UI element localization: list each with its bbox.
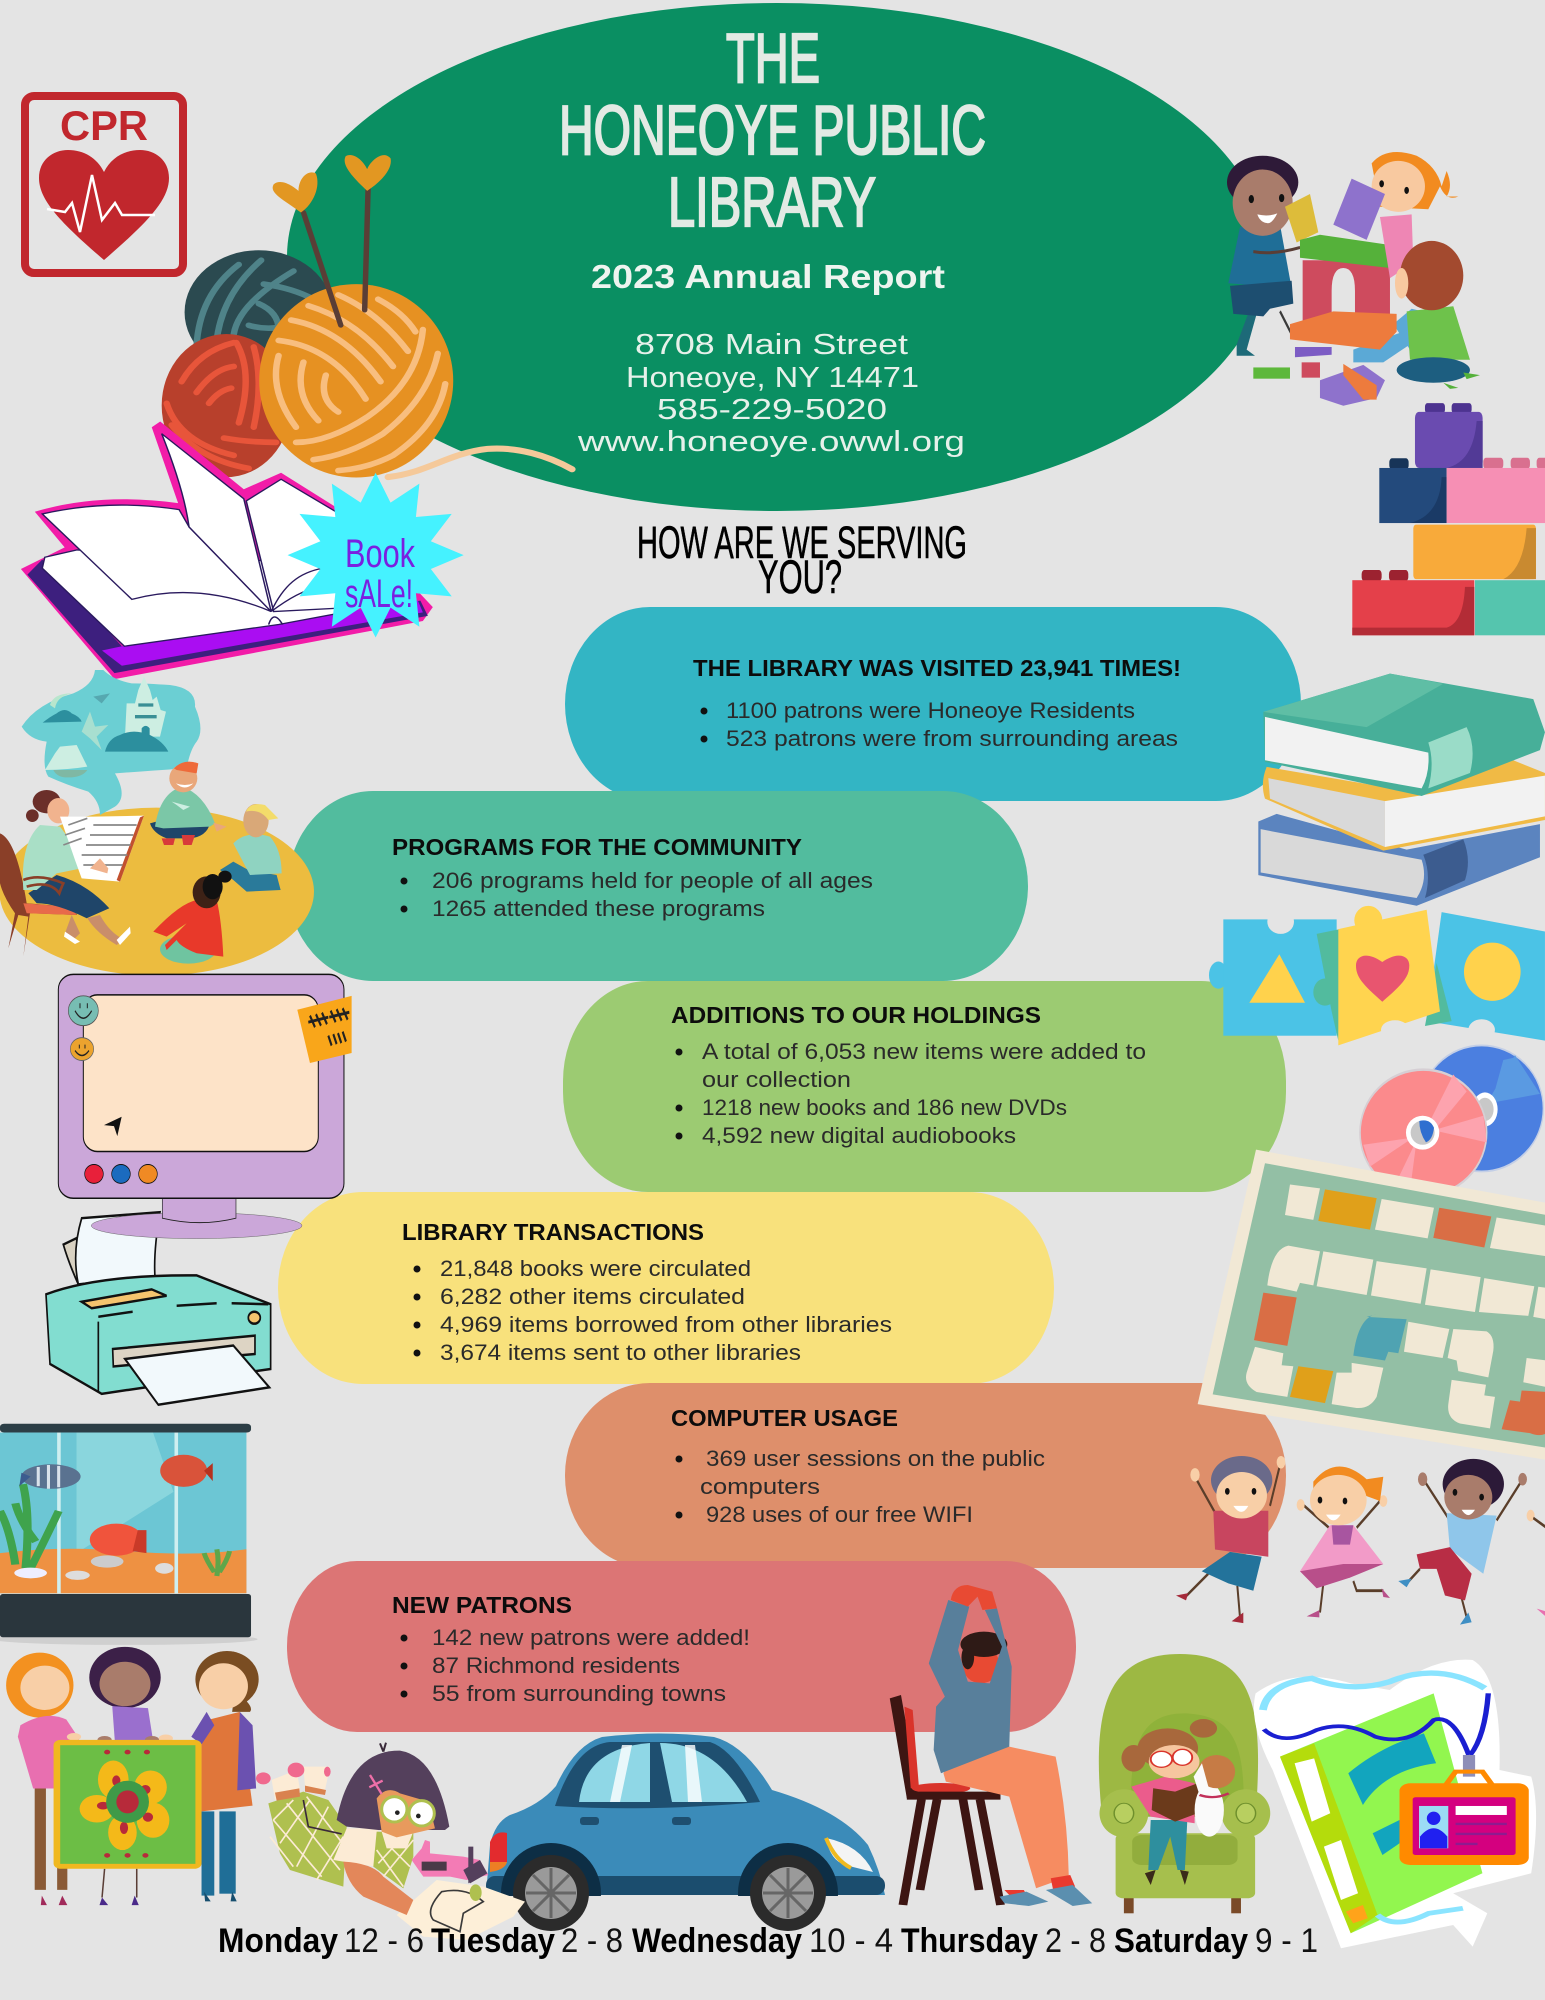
- computer bullets: computers: [700, 1474, 820, 1499]
- holdings bullets: [676, 1039, 1146, 1148]
- transactions bullets: 4,969 items borrowed from other libraries: [440, 1312, 892, 1337]
- contact details: 585-229-5020: [657, 394, 887, 426]
- book sale text: [345, 532, 416, 616]
- patrons bullets: 55 from surrounding towns: [432, 1681, 726, 1706]
- programs bullets: 206 programs held for people of all ages: [432, 868, 873, 893]
- panel: holdings: [563, 981, 1286, 1192]
- opening hours: Thursday: [901, 1922, 1038, 1960]
- sticky note: [297, 996, 352, 1063]
- programs bullets: [400, 868, 873, 921]
- illustration: girl drawing: [256, 1743, 525, 1940]
- computer bullets: [676, 1446, 1045, 1527]
- opening hours: 2 - 8: [561, 1922, 623, 1960]
- holdings heading: ADDITIONS TO OUR HOLDINGS: [671, 1002, 1041, 1028]
- teacher and chair: [0, 790, 144, 957]
- icon: CPR sign: [25, 96, 183, 273]
- opening hours: 10 - 4: [809, 1922, 893, 1960]
- opening hours: 9 - 1: [1255, 1922, 1318, 1960]
- header ellipse with library title and contact details: [287, 3, 1267, 511]
- section heading: [637, 517, 967, 603]
- illustration: man stretching on a chair: [890, 1585, 1092, 1906]
- illustration: fish tank: [0, 1424, 258, 1645]
- icon: CPR sign: CPR: [60, 102, 148, 149]
- opening hours: Wednesday: [632, 1922, 802, 1960]
- book sale text: sALe!: [345, 572, 413, 616]
- transactions bullets: 6,282 other items circulated: [440, 1284, 745, 1309]
- contact details: [577, 329, 965, 458]
- computer bullets: 369 user sessions on the public: [706, 1446, 1045, 1471]
- patrons heading: NEW PATRONS: [392, 1592, 572, 1618]
- opening hours: [218, 1922, 1318, 1960]
- programs bullets: 1265 attended these programs: [432, 896, 765, 921]
- illustration: girl and dog reading in an armchair: [1099, 1654, 1270, 1913]
- panel: computer usage: [565, 1383, 1286, 1568]
- holdings bullets: 4,592 new digital audiobooks: [702, 1123, 1016, 1148]
- computer heading: COMPUTER USAGE: [671, 1405, 898, 1431]
- icon: open book with book sale burst: [21, 422, 464, 679]
- title: [559, 19, 986, 241]
- title: THE: [726, 19, 820, 97]
- child three: [1398, 1459, 1527, 1625]
- holdings bullets: A total of 6,053 new items were added to: [702, 1039, 1146, 1064]
- title: LIBRARY: [668, 163, 876, 241]
- contact details: Honeoye, NY 14471: [626, 362, 919, 394]
- subtitle: 2023 Annual Report: [591, 258, 945, 295]
- opening hours: Tuesday: [431, 1922, 555, 1960]
- illustration: jigsaw puzzle pieces: [1209, 906, 1545, 1045]
- section heading: YOU?: [758, 550, 842, 603]
- contact details: www.honeoye.owwl.org: [577, 426, 965, 458]
- holdings bullets: 1218 new books and 186 new DVDs: [702, 1095, 1067, 1120]
- illustration: toy building bricks: [1352, 403, 1545, 635]
- computer bullets: 928 uses of our free WIFI: [706, 1502, 973, 1527]
- panel: new patrons: [287, 1561, 1076, 1732]
- panel: transactions: [278, 1192, 1054, 1384]
- illustration: jumping children: [1176, 1456, 1545, 1625]
- illustration: stack of books: [1258, 674, 1545, 906]
- panel: programs: [288, 791, 1028, 981]
- opening hours: 2 - 8: [1045, 1922, 1106, 1960]
- patrons bullets: 142 new patrons were added!: [432, 1625, 750, 1650]
- id badge: [1400, 1783, 1529, 1865]
- quilt: [54, 1740, 202, 1869]
- patrons bullets: [400, 1625, 750, 1706]
- icon: printer: [46, 1212, 271, 1405]
- illustration: blue car: [486, 1734, 885, 1943]
- transactions bullets: [414, 1256, 892, 1365]
- transactions bullets: 3,674 items sent to other libraries: [440, 1340, 801, 1365]
- icon: CDs and DVDs: [1360, 1045, 1543, 1196]
- thought cloud: [22, 670, 200, 815]
- icon: computer monitor: [58, 974, 352, 1239]
- patrons bullets: 87 Richmond residents: [432, 1653, 680, 1678]
- child one: [1176, 1456, 1285, 1623]
- transactions bullets: 21,848 books were circulated: [440, 1256, 751, 1281]
- panel: visits: [565, 607, 1301, 801]
- child two: [1297, 1466, 1390, 1617]
- illustration: board game: [1198, 1150, 1545, 1460]
- visits bullets: 1100 patrons were Honeoye Residents: [726, 698, 1135, 723]
- transactions heading: LIBRARY TRANSACTIONS: [402, 1219, 704, 1245]
- icon: yarn balls and knitting needles: [162, 155, 572, 478]
- visits heading: THE LIBRARY WAS VISITED 23,941 TIMES!: [693, 655, 1181, 681]
- illustration: three women holding a quilt: [6, 1647, 259, 1905]
- visits bullets: 523 patrons were from surrounding areas: [726, 726, 1178, 751]
- illustration: library card binder with lanyard: [1254, 1660, 1536, 1948]
- visits bullets: [700, 698, 1178, 751]
- holdings bullets: our collection: [702, 1067, 851, 1092]
- illustration: children building with blocks: [1227, 152, 1480, 406]
- title: HONEOYE PUBLIC: [559, 91, 986, 169]
- contact details: 8708 Main Street: [635, 329, 908, 361]
- seated children: [150, 762, 282, 964]
- programs heading: PROGRAMS FOR THE COMMUNITY: [392, 834, 802, 860]
- man's shirt and raised arms: [929, 1600, 1012, 1773]
- child four, cropped: [1527, 1510, 1545, 1617]
- section heading: HOW ARE WE SERVING: [637, 517, 967, 568]
- opening hours: Saturday: [1114, 1922, 1248, 1960]
- opening hours: 12 - 6: [344, 1922, 424, 1960]
- book sale text: Book: [345, 532, 416, 576]
- illustration: story time group: [0, 670, 314, 976]
- opening hours: Monday: [218, 1922, 338, 1960]
